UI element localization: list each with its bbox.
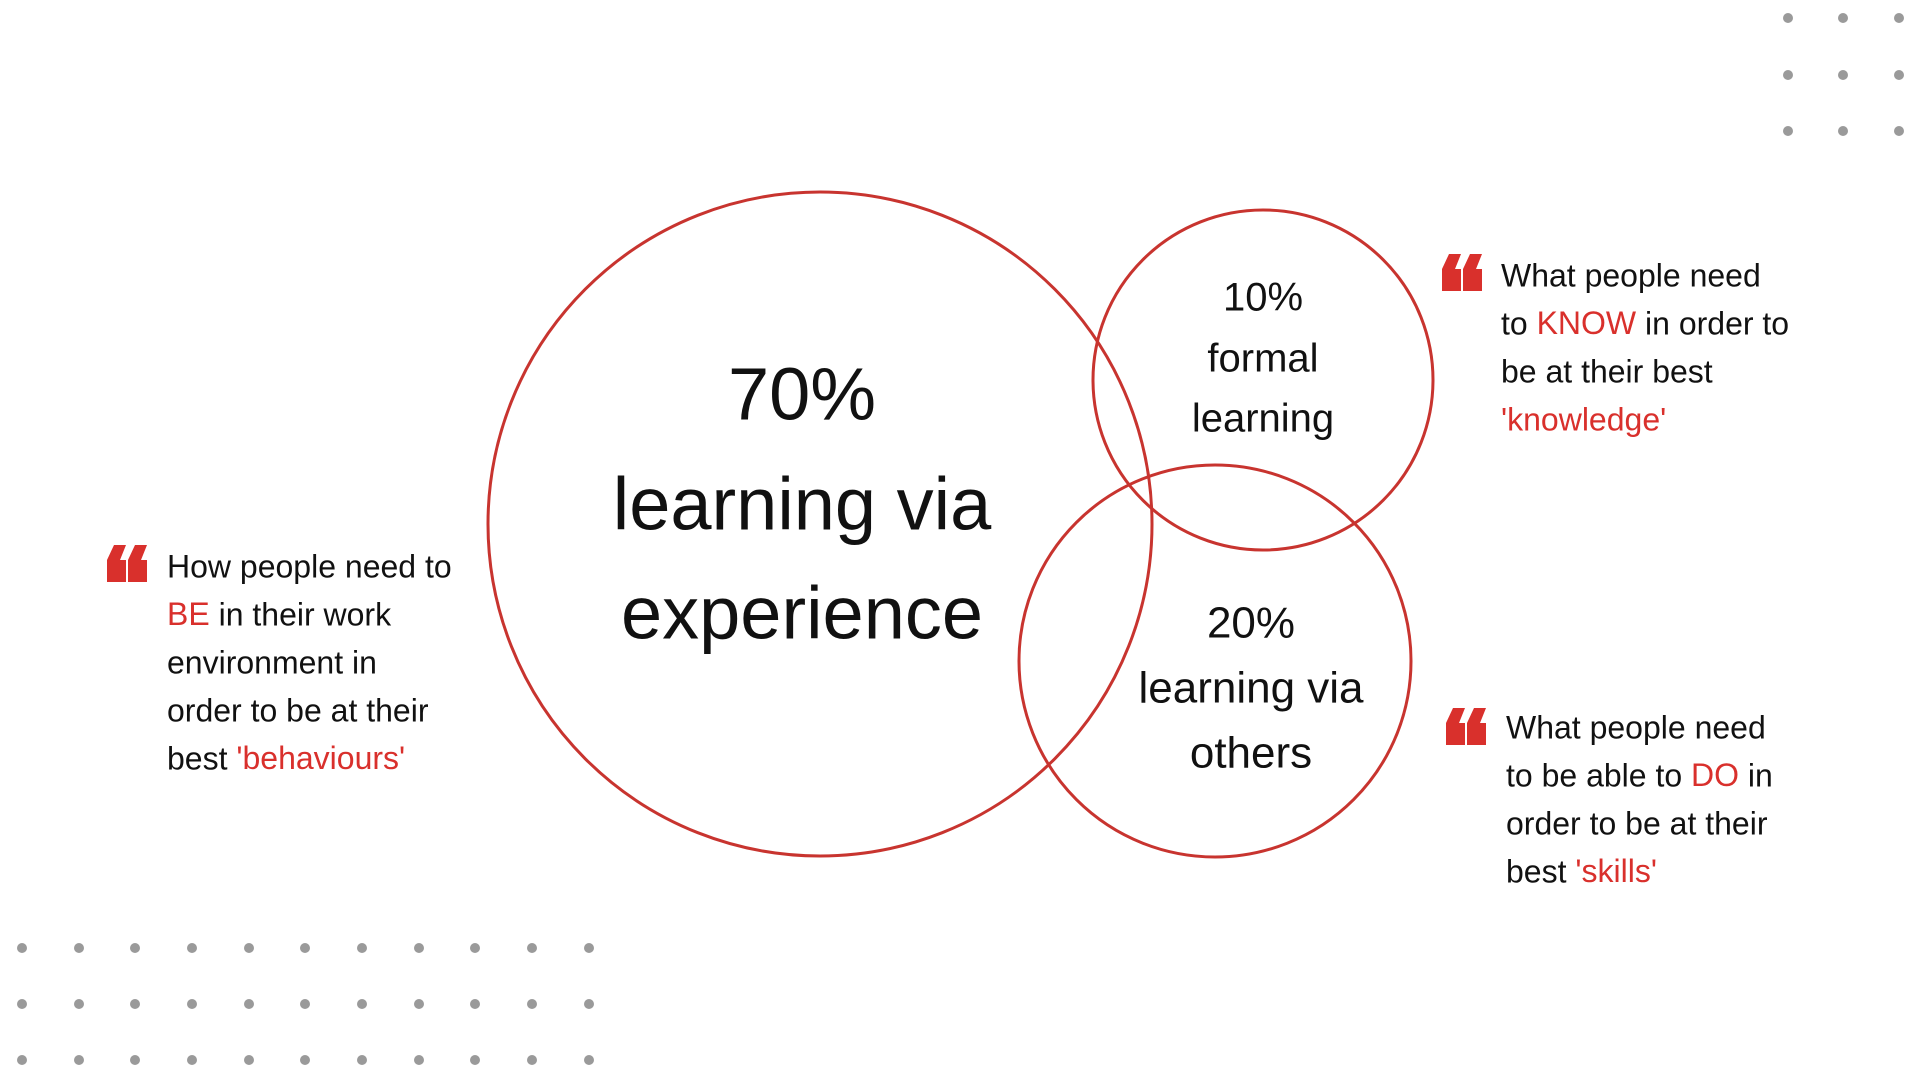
quote: knowledge xyxy=(1442,254,1789,437)
quote: knowledge: What people need xyxy=(1501,257,1761,293)
quote: behaviours: BE in their work xyxy=(167,596,392,632)
quote: skills: best 'skills' xyxy=(1506,853,1657,889)
text: 20% learning via others: others xyxy=(1190,729,1312,778)
circle: 20% learning via others xyxy=(1019,465,1411,857)
quote: behaviours: How people need to xyxy=(167,548,452,584)
dots: bottom left grid xyxy=(17,943,594,1065)
text: 10% formal learning: learning xyxy=(1192,397,1334,441)
text: 20% learning via others: learning via xyxy=(1138,664,1364,713)
text: 20% learning via others: 20% xyxy=(1207,599,1295,648)
quote: skills: to be able to DO in xyxy=(1506,757,1773,793)
icon: quote mark left xyxy=(107,545,147,582)
quote: behaviours xyxy=(107,545,452,776)
icon: quote mark bottom right xyxy=(1446,708,1486,745)
quote: behaviours: environment in xyxy=(167,644,377,680)
quote: skills: What people need xyxy=(1506,709,1766,745)
quote: behaviours: order to be at their xyxy=(167,692,429,728)
text: 10% formal learning xyxy=(1192,276,1334,441)
quote: skills: order to be at their xyxy=(1506,805,1768,841)
quote: skills xyxy=(1446,708,1773,889)
icon: quote mark top right xyxy=(1442,254,1482,291)
dots: top right grid xyxy=(1783,13,1904,136)
quote: knowledge: 'knowledge' xyxy=(1501,401,1666,437)
circle: 10% formal learning xyxy=(1093,210,1433,550)
quote: behaviours: best 'behaviours' xyxy=(167,740,405,776)
circle: 70% experience xyxy=(488,192,1152,856)
quote: knowledge: to KNOW in order to xyxy=(1501,305,1789,341)
text: 70% learning via experience xyxy=(613,353,992,655)
quote: knowledge: be at their best xyxy=(1501,353,1713,389)
text: 10% formal learning: formal xyxy=(1207,337,1319,381)
text: 70% learning via experience: experience xyxy=(621,572,983,655)
text: 10% formal learning: 10% xyxy=(1223,276,1303,320)
text: 20% learning via others xyxy=(1138,599,1364,778)
text: 70% learning via experience: learning via xyxy=(613,463,992,546)
text: 70% learning via experience: 70% xyxy=(728,353,876,436)
